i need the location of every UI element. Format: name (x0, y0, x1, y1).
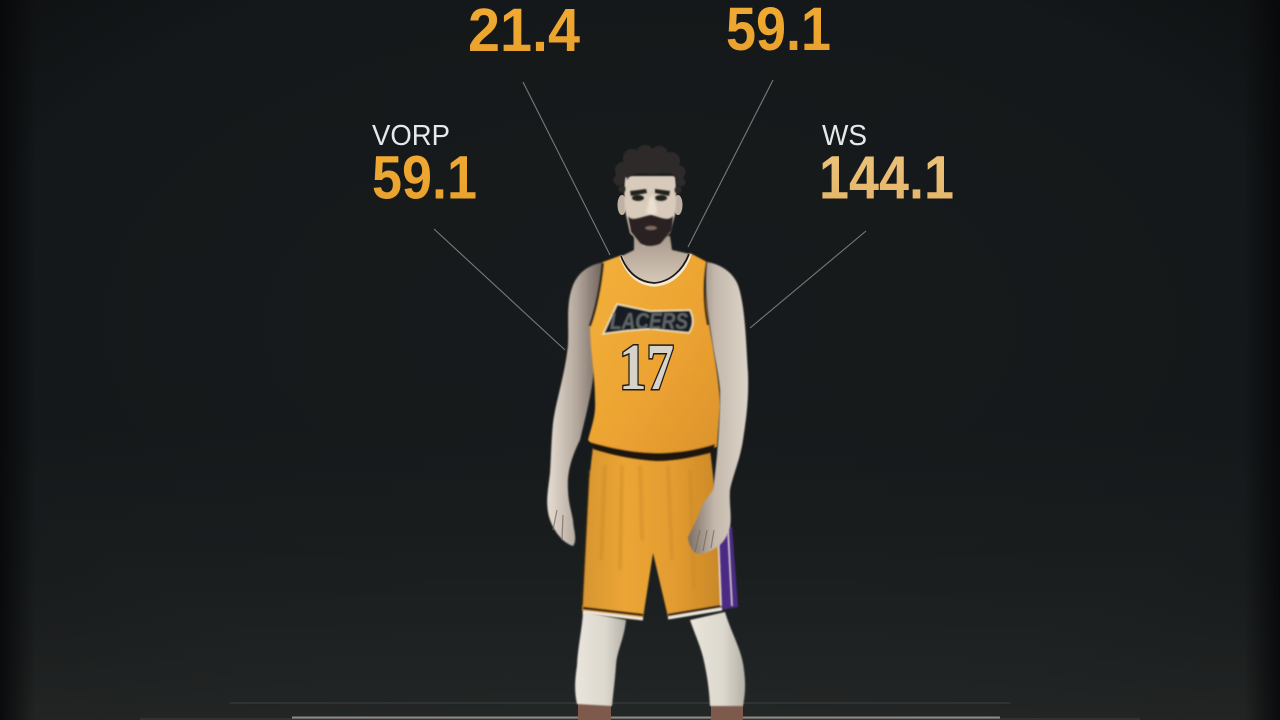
jersey number: 17 (619, 331, 674, 404)
jersey wordmark: LACERS (610, 308, 689, 334)
leader lines (434, 80, 866, 350)
beard (628, 215, 673, 246)
basketball player figure (547, 145, 748, 720)
stat: WS (819, 120, 954, 212)
stat: WS: WS (822, 120, 867, 152)
neck and chest (622, 236, 690, 284)
jersey (588, 253, 720, 461)
mouth (645, 226, 657, 230)
knee sleeves (575, 612, 745, 706)
stat: VORP: 59.1 (372, 144, 477, 212)
court floor lines (140, 703, 1140, 719)
hand fingers (553, 510, 714, 552)
brows and eyes (630, 189, 670, 201)
right arm (688, 262, 748, 554)
left arm (547, 262, 605, 546)
face (624, 176, 676, 246)
hair (614, 145, 686, 194)
purple shorts side panel (716, 525, 738, 610)
shorts folds (601, 465, 694, 590)
shorts (582, 447, 732, 619)
lower legs (578, 700, 743, 720)
stat: VORP: VORP (372, 120, 450, 152)
stat: VORP (372, 120, 477, 212)
stat: WS: 144.1 (819, 144, 954, 212)
collar (621, 254, 690, 285)
ears (618, 195, 682, 215)
nose shadow (646, 196, 657, 216)
